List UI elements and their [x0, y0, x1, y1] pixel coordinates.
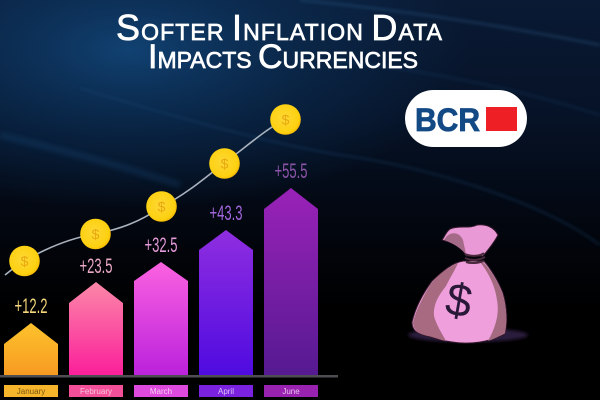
title line 2: IMPACTS CURRENCIES [148, 38, 418, 76]
value labels: +12.2 [14, 295, 48, 318]
bar: January [4, 323, 58, 375]
bar chart [0, 160, 338, 397]
coin 5 [270, 104, 301, 135]
bag body [412, 261, 507, 343]
rope [465, 253, 485, 263]
coin 4 [209, 148, 240, 179]
bar: February [69, 282, 123, 375]
title line 1: SOFTER INFLATION DATA [116, 7, 443, 48]
coin 2: $ [92, 226, 100, 242]
month labels: June [282, 387, 300, 396]
coin 1 [9, 246, 40, 276]
month labels: April [218, 387, 234, 396]
logo: BCR [405, 90, 527, 147]
value labels: +43.3 [210, 202, 242, 225]
bar: June [264, 188, 318, 375]
axis [0, 375, 338, 378]
bag neck shading [444, 233, 466, 254]
coin 2 [80, 219, 111, 249]
bag neck [442, 225, 498, 256]
trend line [5, 119, 285, 275]
month labels: January [17, 387, 45, 396]
month labels: February [80, 387, 112, 396]
coin 1: $ [21, 253, 29, 269]
title [116, 7, 443, 76]
value labels: +23.5 [80, 255, 112, 278]
value labels: +55.5 [274, 160, 308, 183]
icon: money bag [408, 225, 528, 343]
bag shading left [413, 263, 458, 341]
logo red square [486, 107, 517, 131]
coin 3 [146, 191, 177, 222]
coin 3: $ [158, 198, 166, 214]
dollar sign: $ [442, 272, 476, 328]
value labels [14, 160, 308, 318]
logo text: BCR [415, 102, 480, 138]
value labels: +32.5 [144, 234, 178, 257]
bar: March [134, 262, 188, 375]
month labels [4, 385, 318, 397]
bag shadow [408, 328, 528, 342]
bar: April [199, 230, 253, 375]
bag shading right [480, 262, 506, 341]
line with coins [5, 104, 301, 276]
coin 5: $ [282, 112, 290, 128]
month labels: March [150, 387, 172, 396]
coin 4: $ [221, 156, 229, 172]
